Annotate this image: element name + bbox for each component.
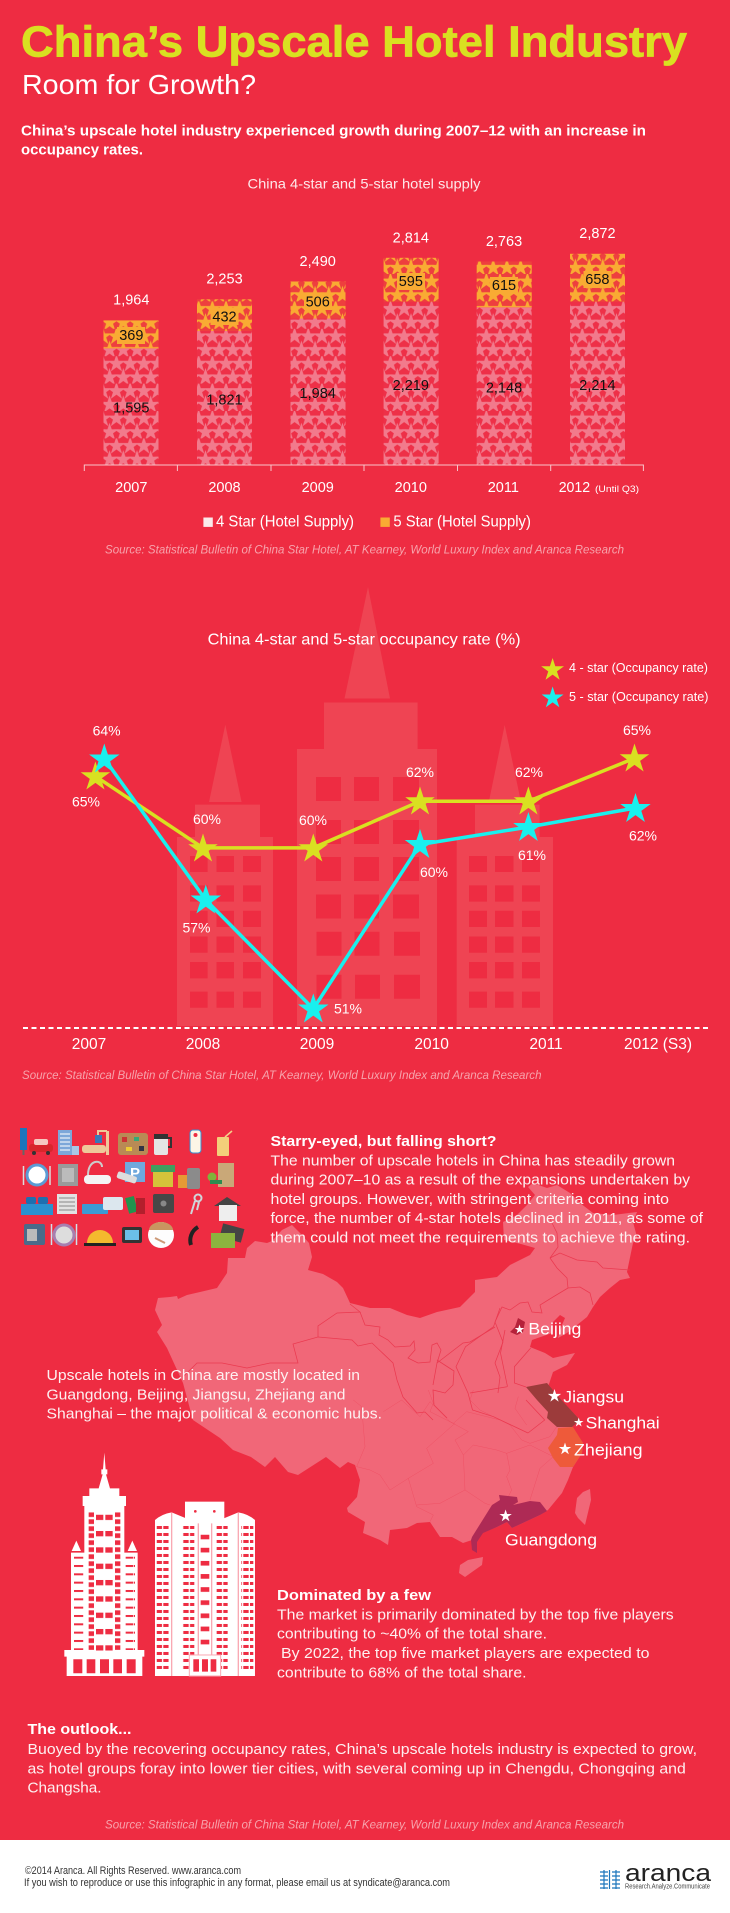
text block: starry-eyed (270, 1133, 704, 1246)
text block: upscale hotels location (46, 1368, 382, 1422)
icon: door hanger (190, 1130, 201, 1153)
totals: 2,814 (393, 230, 429, 246)
icon: service bell (84, 1230, 116, 1246)
text block: upscale hotels location: Shanghai – the major political & economic hubs. (46, 1406, 382, 1422)
map: Taiwan (575, 1489, 591, 1525)
4 star values: 1,595 (113, 401, 149, 417)
province: Beijing (510, 1318, 525, 1335)
paragraph (270, 1153, 704, 1246)
icon: bathtub with shower (82, 1131, 109, 1155)
year 2012 label (559, 480, 639, 496)
map labels: Guangdong (505, 1532, 597, 1550)
icon: patterned plate (52, 1224, 76, 1245)
4 star values: 1,821 (206, 392, 243, 408)
value labels: 65% (623, 722, 651, 738)
4 star values: 2,148 (486, 381, 522, 397)
icon: keys (191, 1194, 202, 1214)
icon: tickets (125, 1196, 145, 1214)
icon: hotel building (58, 1130, 79, 1155)
years: 2009 (300, 1036, 334, 1053)
icon: luggage (178, 1168, 200, 1189)
years: 2010 (414, 1036, 449, 1053)
5 star values: 432 (212, 310, 237, 326)
icon: folded linen (82, 1197, 123, 1214)
4 star values: 2,214 (579, 378, 616, 394)
value labels: 51% (334, 1000, 362, 1016)
totals (113, 226, 616, 309)
years: 2007 (72, 1036, 106, 1053)
paragraph: contributing to ~40% of the total share. (277, 1627, 547, 1643)
value labels: 62% (406, 764, 434, 780)
source note: Source: Statistical Bulletin of China Star Hotel, AT Kearney, World Luxury Index and Aranca Research (22, 1068, 542, 1082)
background buildings (177, 587, 553, 1026)
logo: aranca: Research.Analyze.Communicate (625, 1884, 710, 1890)
map labels (505, 1321, 660, 1550)
text block: upscale hotels location: Guangdong, Beijing, Jiangsu, Zhejiang and (46, 1387, 346, 1403)
years: 2012 (S3) (624, 1036, 692, 1053)
dashed axis (23, 1027, 708, 1029)
5 star label backings (117, 271, 612, 344)
icon: parking sign and camera: P (130, 1165, 140, 1182)
paragraph: contribute to 68% of the total share. (277, 1665, 526, 1681)
totals: 2,872 (579, 226, 616, 242)
value labels (72, 722, 657, 1016)
5 star values: 615 (492, 278, 516, 294)
legend (203, 514, 531, 530)
4 star values: 2,219 (393, 378, 429, 394)
years: 2010 (395, 480, 427, 496)
value labels: 61% (518, 847, 546, 863)
icon: handset (190, 1227, 198, 1245)
intro text (21, 124, 646, 158)
chart title: China 4-star and 5-star occupancy rate (%) (208, 632, 521, 648)
bars: 5 star (104, 254, 625, 348)
totals: 2,490 (300, 254, 336, 270)
map of China (155, 1183, 660, 1577)
map stars (499, 1324, 583, 1521)
5 star values: 506 (306, 294, 330, 310)
province: Jiangsu and Shanghai (526, 1383, 580, 1427)
icon: towel (151, 1165, 175, 1187)
legend: 5 - star (Occupancy rate) (569, 689, 708, 704)
icon: bank cards (211, 1223, 244, 1248)
copyright text (24, 1865, 450, 1889)
heading: Starry-eyed, but falling short? (270, 1133, 496, 1150)
subtitle: Room for Growth? (22, 69, 256, 100)
intro text: occupancy rates. (21, 142, 143, 158)
map: Hainan (459, 1557, 483, 1577)
province: Guangdong (471, 1495, 547, 1553)
copyright text: ©2014 Aranca. All Rights Reserved. www.aranca.com (25, 1865, 241, 1877)
right tower (155, 1502, 255, 1676)
paragraph: as hotel groups foray into lower tier cities, with several coming up in Chengdu, Chongqing and (28, 1761, 686, 1777)
value labels: 62% (629, 827, 657, 843)
left tower (64, 1453, 144, 1676)
icon: safe (58, 1164, 78, 1186)
source note: Source: Statistical Bulletin of China Star Hotel, AT Kearney, World Luxury Index and Aranca Research (105, 542, 624, 556)
footer panel (0, 1840, 730, 1913)
intro text: China’s upscale hotel industry experienced growth during 2007–12 with an increase in (21, 124, 646, 140)
map: mainland (155, 1183, 637, 1545)
value labels: 60% (420, 864, 448, 880)
text block: dominated by a few (277, 1587, 674, 1681)
icon: mug (154, 1134, 171, 1155)
years: 2011 (529, 1036, 563, 1053)
value labels: 64% (93, 723, 121, 739)
value labels: 60% (299, 812, 327, 828)
paragraph: The market is primarily dominated by the top five players (277, 1607, 674, 1623)
paragraph: hotel groups. However, with stringent criteria coming into (270, 1192, 669, 1208)
years (72, 1036, 692, 1053)
value labels: 65% (72, 794, 100, 810)
5 star values: 658 (585, 272, 610, 288)
5 star values (119, 272, 610, 344)
paragraph: By 2022, the top five market players are expected to (281, 1646, 650, 1662)
icon: plate with cutlery (24, 1165, 50, 1185)
year 2012 label: 2012 (559, 480, 590, 496)
text block: upscale hotels location: Upscale hotels in China are mostly located in (46, 1368, 360, 1384)
map: province borders (183, 1215, 630, 1522)
icon grid: hotel amenities (20, 1128, 244, 1248)
5 star values: 369 (119, 328, 143, 344)
map labels: Jiangsu (563, 1389, 624, 1407)
paragraph (277, 1607, 674, 1681)
icon: bed (21, 1197, 53, 1215)
series: 5 star line (104, 759, 636, 1009)
heading: Dominated by a few (277, 1587, 431, 1604)
logo: aranca: aranca (625, 1860, 712, 1887)
5 star values: 595 (399, 274, 423, 290)
markers: 5 star (89, 744, 651, 1022)
text block: the outlook (28, 1721, 697, 1797)
bars: 4 star (104, 302, 625, 465)
legend (541, 658, 708, 707)
icon: white towers (64, 1453, 255, 1676)
totals: 1,964 (113, 293, 149, 309)
years: 2008 (186, 1036, 220, 1053)
icon: parking sign and camera (116, 1162, 145, 1184)
4 star values (113, 378, 616, 417)
totals: 2,253 (206, 272, 243, 288)
icon: hanger tag (214, 1197, 241, 1221)
years (115, 480, 519, 496)
paragraph: Buoyed by the recovering occupancy rates, China’s upscale hotels industry is expected to grow, (28, 1742, 697, 1758)
paragraph: them could not meet the requirements to achieve the rating. (270, 1230, 690, 1246)
icon: parking sign and car (20, 1128, 53, 1155)
copyright text: If you wish to reproduce or use this infographic in any format, please email us at syndicate@aranca.com (24, 1877, 450, 1889)
axis (84, 465, 643, 471)
paragraph: during 2007–10 as a result of the expansions undertaken by (270, 1173, 691, 1189)
icon: television (122, 1227, 142, 1243)
value labels: 57% (182, 919, 211, 935)
heading: The outlook... (28, 1721, 132, 1738)
paragraph: The number of upscale hotels in China has steadily grown (270, 1153, 675, 1169)
markers: 4 star (81, 744, 649, 862)
icon: beach scene (148, 1222, 174, 1248)
legend: 4 - star (Occupancy rate) (569, 660, 708, 675)
year 2012 label: (Until Q3) (595, 484, 639, 494)
years: 2011 (488, 480, 519, 496)
series: 4 star line (95, 758, 634, 848)
icon: suitcase (118, 1133, 148, 1155)
paragraph: Changsha. (28, 1781, 102, 1797)
4 star values: 1,984 (300, 386, 336, 402)
chart title: China 4-star and 5-star hotel supply (248, 176, 480, 192)
years: 2009 (302, 480, 334, 496)
logo: aranca (600, 1860, 712, 1890)
map labels: Shanghai (586, 1414, 660, 1432)
paragraph: force, the number of 4-star hotels declined in 2011, as some of (270, 1211, 704, 1227)
legend: 4 Star (Hotel Supply) (216, 514, 354, 530)
value labels: 62% (515, 764, 543, 780)
line chart: occupancy rate (23, 632, 708, 1053)
icon: telephone (24, 1224, 45, 1245)
bar chart: hotel supply (84, 176, 643, 530)
icon: hotel with trees (208, 1163, 234, 1187)
title: China’s Upscale Hotel Industry (21, 18, 688, 66)
source note: Source: Statistical Bulletin of China Star Hotel, AT Kearney, World Luxury Index and Aranca Research (105, 1818, 624, 1832)
icon: newspaper (57, 1194, 77, 1214)
legend: 5 Star (Hotel Supply) (393, 514, 531, 530)
map labels: Beijing (528, 1321, 581, 1339)
totals: 2,763 (486, 234, 522, 250)
value labels: 60% (193, 811, 221, 827)
icon: bath with shower arc (84, 1162, 111, 1184)
paragraph (28, 1742, 697, 1797)
map labels: Zhejiang (574, 1442, 642, 1460)
province: Zhejiang (548, 1427, 583, 1467)
years: 2007 (115, 480, 147, 496)
icon: juice glass (217, 1131, 232, 1156)
icon: dark safe (153, 1194, 174, 1213)
years: 2008 (208, 480, 241, 496)
